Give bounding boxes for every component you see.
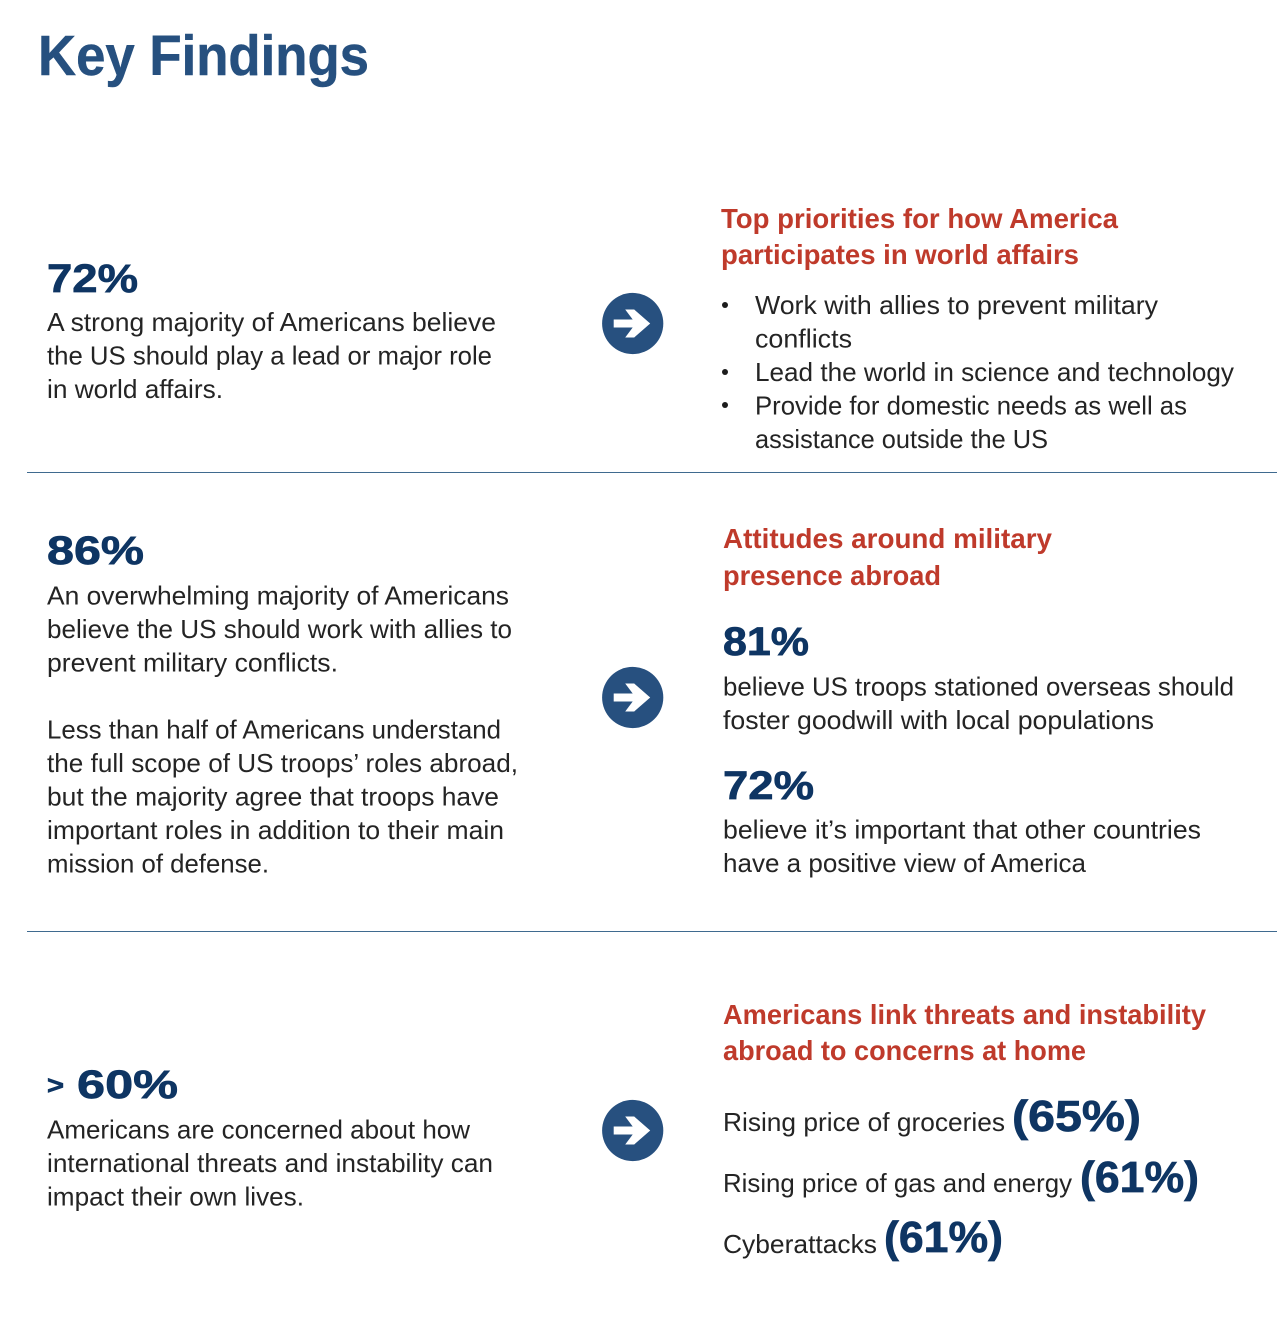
statistic: 81%: 81% [723,620,809,664]
text block: lead role description: in world affairs. [47,374,223,404]
statistic: 72%: 72% [723,764,814,808]
heading: military presence [723,523,1052,591]
list item: gas and energy 61% [723,1153,1199,1202]
icon: arrow 3 [602,1100,663,1161]
text block: allies description: believe the US should work with allies to [47,614,512,644]
list item: cyberattacks 61% [723,1213,1003,1262]
heading: military presence: Attitudes around military [723,523,1052,554]
text block: threats description [47,1114,493,1212]
list item: groceries 65%: Rising price of groceries [723,1107,1005,1137]
text block: troops roles description: mission of defense. [47,848,269,878]
panel: 72% lead role finding [47,257,496,404]
heading: top priorities: Top priorities for how America [721,203,1118,234]
list item: gas and energy 61%: Rising price of gas and energy [723,1168,1072,1198]
bullet list: priorities: Lead the world in science and technology [755,357,1234,387]
text block: positive view [723,814,1201,878]
icon: arrow 2 [602,667,663,728]
panel: over 60% concerned finding [47,1063,493,1212]
text block: troops roles description: but the majority agree that troops have [47,782,499,812]
heading: military presence: presence abroad [723,560,941,591]
bullet list: priorities: conflicts [755,324,852,354]
text block: troops roles description: the full scope of US troops’ roles abroad, [47,748,518,778]
heading: threats and instability: Americans link threats and instability [723,999,1206,1030]
icon: arrow 1 [602,293,663,354]
list item: groceries 65% [723,1092,1141,1141]
text block: troops roles description [47,714,518,878]
list item: gas and energy 61%: (61%) [1080,1153,1199,1202]
text block: threats description: impact their own lives. [47,1182,304,1212]
text block: positive view: have a positive view of America [723,848,1087,878]
panel: threats linked to home concerns [723,999,1206,1262]
heading: top priorities: participates in world affairs [721,239,1079,270]
list item: cyberattacks 61%: (61%) [884,1213,1003,1262]
statistic: over 60%: 60% [77,1063,178,1107]
text block: lead role description: the US should play a lead or major role [47,340,492,370]
text block: threats description: Americans are concerned about how [47,1114,470,1144]
bullet list: priorities: Work with allies to prevent military [755,290,1158,320]
text block: allies description: An overwhelming majority of Americans [47,580,509,610]
text block: goodwill: believe US troops stationed overseas should [723,672,1234,702]
text block: goodwill [723,672,1234,735]
text block: allies description [47,580,512,678]
bullet list: priorities: Provide for domestic needs as well as [755,390,1187,420]
panel: 86% work with allies finding [47,529,518,878]
text block: troops roles description: Less than half of Americans understand [47,714,501,744]
bullet list: priorities [722,290,1234,454]
panel: military presence attitudes [723,523,1234,878]
statistic: over 60% [47,1063,178,1107]
statistic: 72%: 72% [47,257,138,301]
heading: threats and instability: abroad to concerns at home [723,1035,1086,1066]
title: Key Findings [38,24,369,88]
statistic: 86%: 86% [47,529,144,573]
text block: goodwill: foster goodwill with local populations [723,705,1154,735]
statistic: over 60%: > [47,1070,64,1100]
panel: top priorities [721,203,1234,454]
text block: threats description: international threats and instability can [47,1148,493,1178]
text block: lead role description [47,307,496,404]
list item: groceries 65%: (65%) [1012,1092,1141,1141]
text block: allies description: prevent military conflicts. [47,648,338,678]
bullet list: priorities: assistance outside the US [755,424,1048,454]
text block: positive view: believe it’s important that other countries [723,814,1201,844]
heading: threats and instability [723,999,1206,1066]
heading: top priorities [721,203,1118,270]
text block: lead role description: A strong majority of Americans believe [47,307,496,337]
text block: troops roles description: important roles in addition to their main [47,815,504,845]
list item: cyberattacks 61%: Cyberattacks [723,1229,877,1259]
